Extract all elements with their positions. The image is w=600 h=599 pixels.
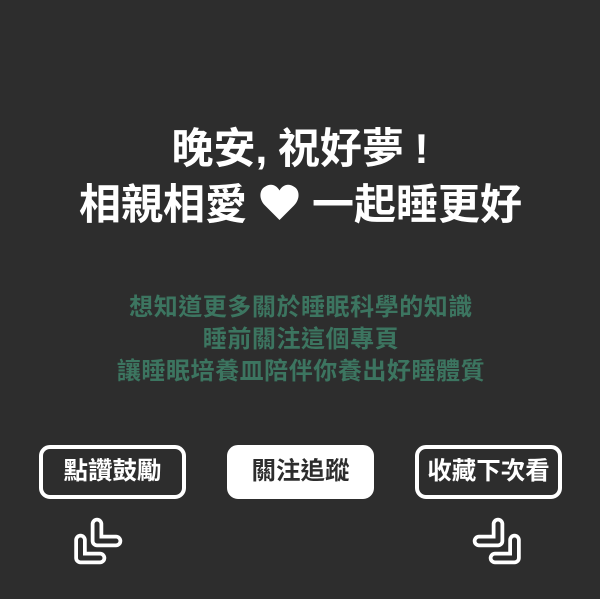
subtitle text block: 睡前關注這個專頁 — [203, 326, 399, 353]
title line 2 with heart — [79, 181, 522, 228]
button: save: 收藏下次看 — [427, 458, 550, 485]
button: like — [39, 445, 186, 499]
button: like: 點讚鼓勵 — [64, 458, 162, 485]
subtitle text block: 讓睡眠培養皿陪伴你養出好睡體質 — [117, 358, 485, 385]
subtitle text block: 想知道更多關於睡眠科學的知識 — [129, 294, 473, 321]
title line 1: 晚安, 祝好夢 ! — [172, 125, 428, 172]
title line 2 with heart: 一起睡更好 — [312, 181, 522, 228]
button: follow — [227, 445, 374, 499]
button: save — [415, 445, 562, 499]
title line 2 with heart: 相親相愛 — [79, 181, 247, 228]
button: follow: 關注追蹤 — [252, 458, 350, 485]
subtitle text block — [117, 294, 485, 385]
